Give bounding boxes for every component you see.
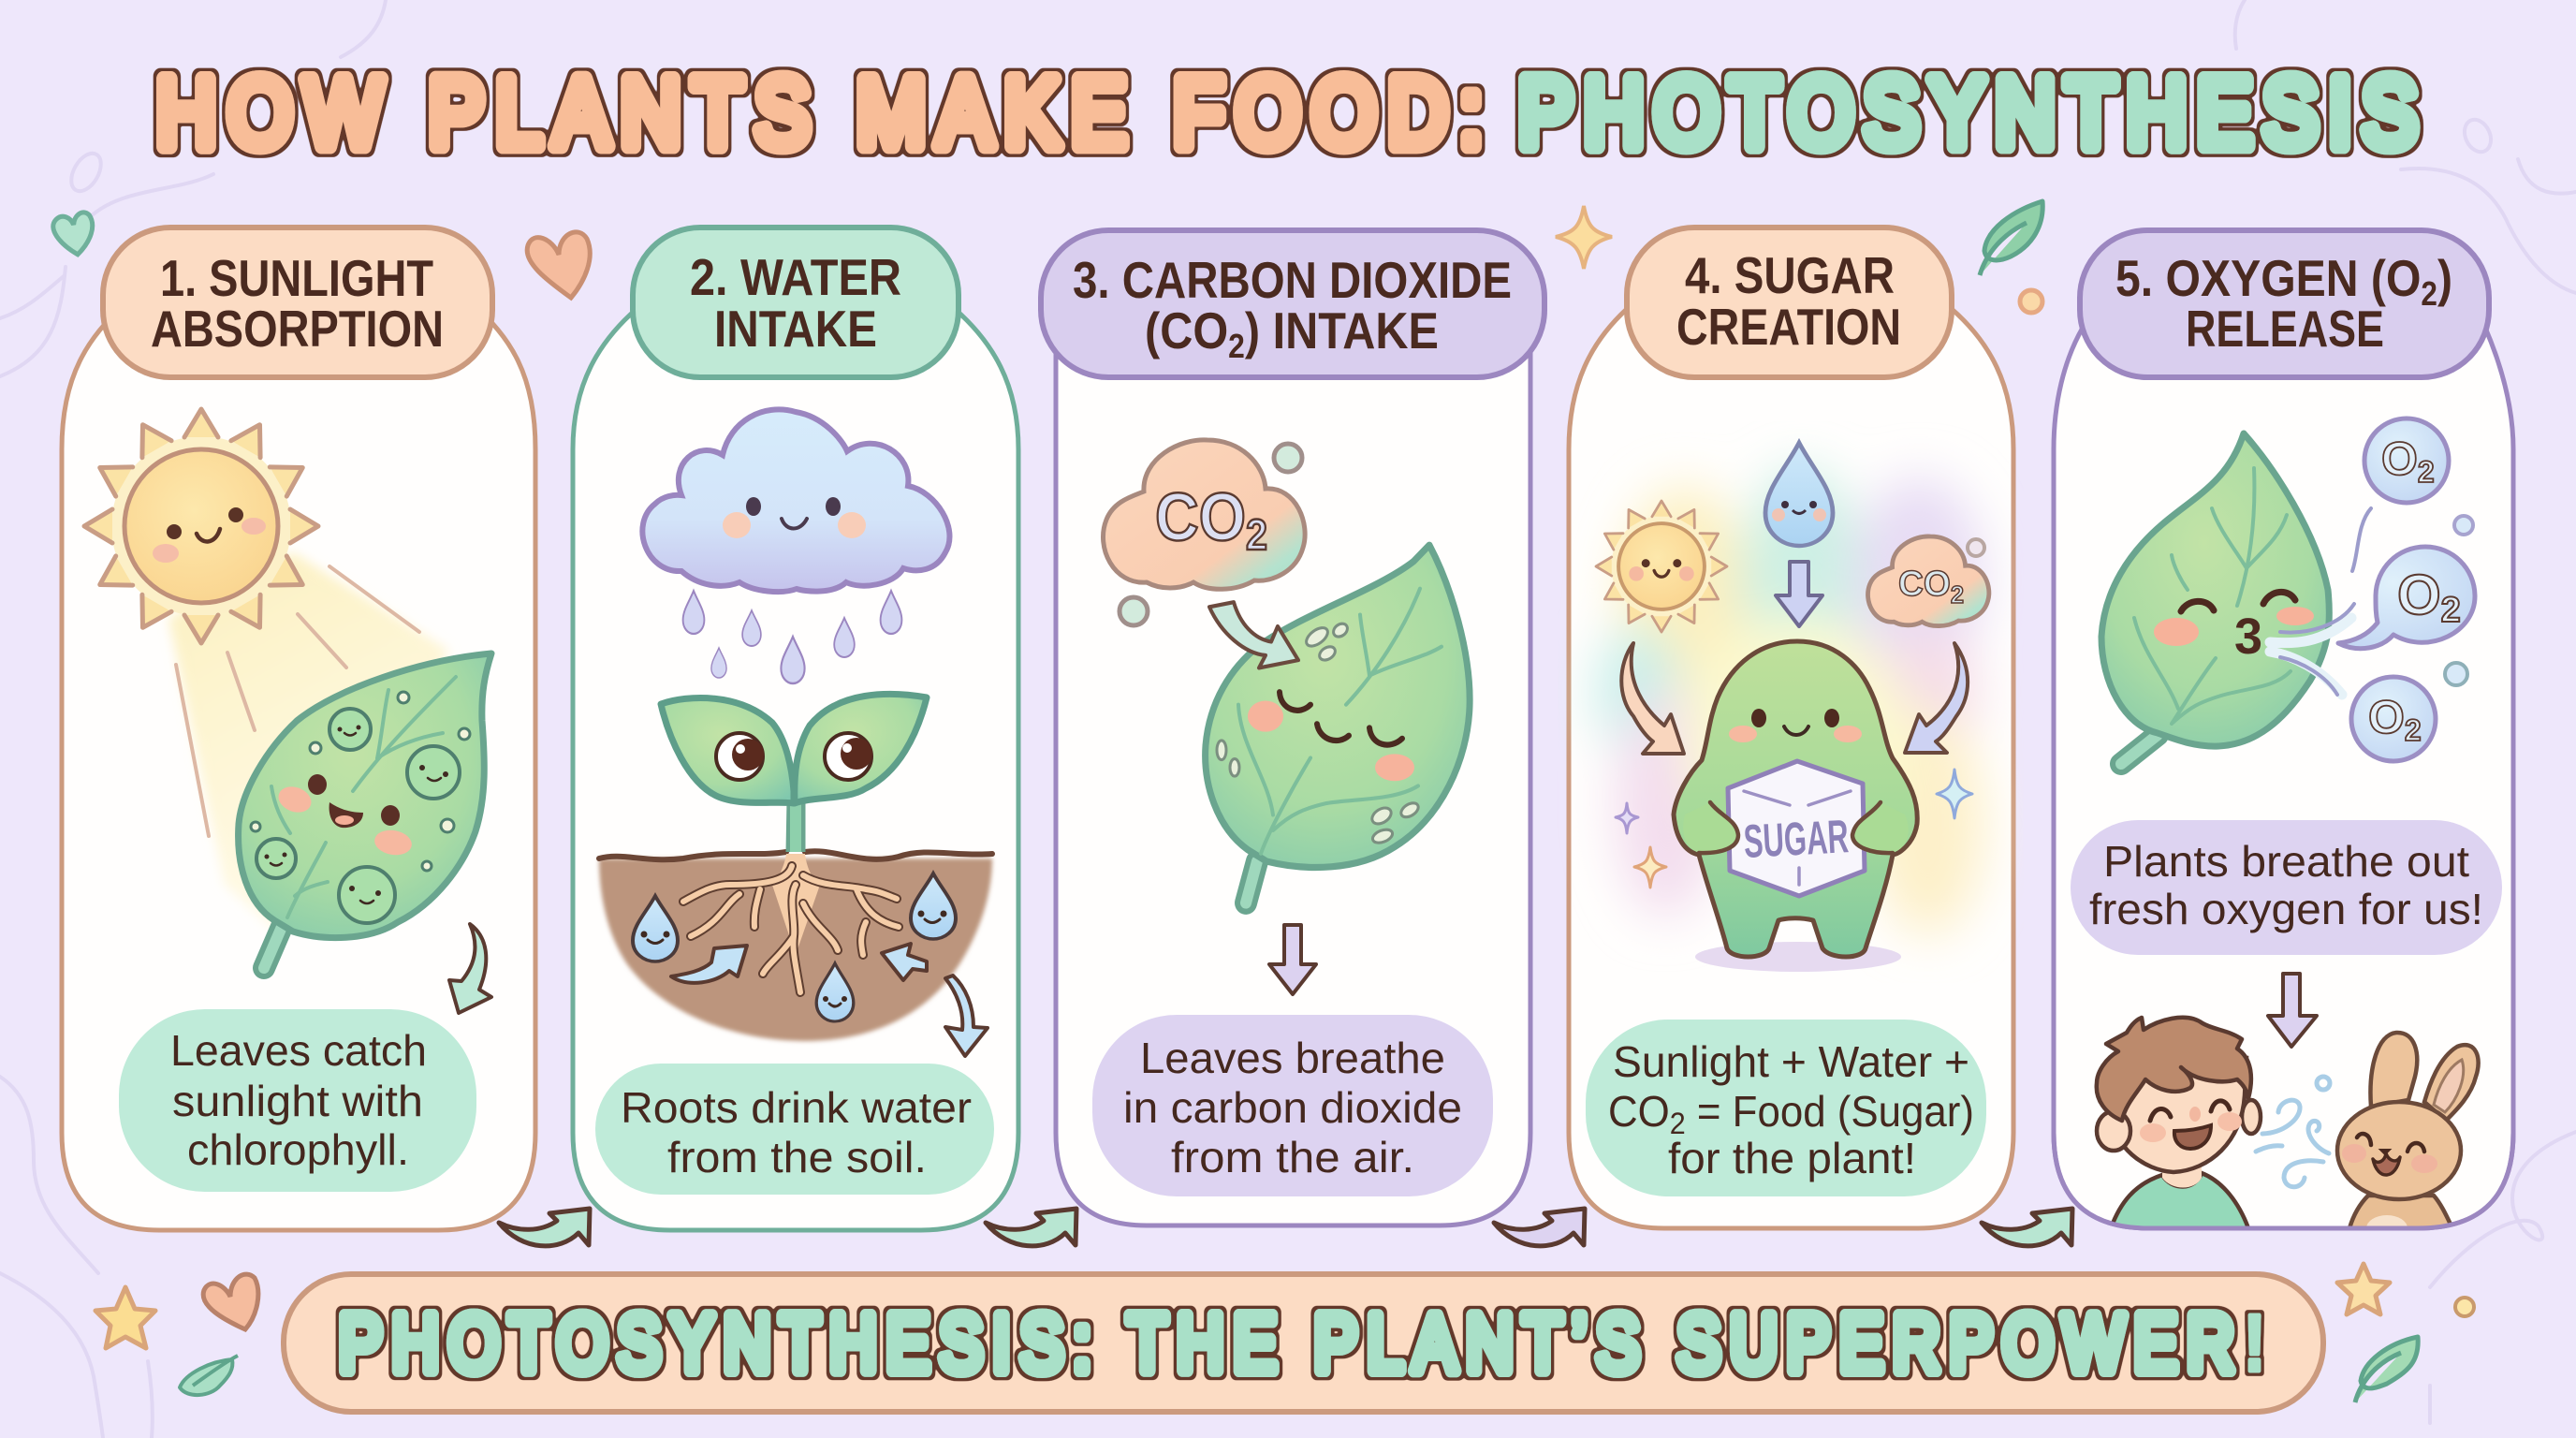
oxygen bubbles: 2 (2418, 455, 2435, 489)
arrow: caption to child (2268, 974, 2317, 1047)
oxygen bubbles: 2 (2441, 591, 2461, 630)
icon: water drop (1765, 443, 1833, 546)
shadow (1695, 942, 1901, 972)
caption 3: in carbon dioxide (1123, 1083, 1462, 1132)
title: PHOTOSYNTHESIS (1518, 59, 2418, 168)
panel 5 header: RELEASE (2186, 300, 2384, 358)
footer banner (284, 1274, 2323, 1412)
caption 2 (595, 1064, 994, 1195)
caption 1: chlorophyll. (187, 1125, 409, 1174)
icon: bottom right dot (2455, 1298, 2474, 1316)
title: HOW PLANTS MAKE FOOD: (156, 59, 1483, 168)
icon: bottom heart (203, 1274, 258, 1329)
footer text: PHOTOSYNTHESIS: THE PLANT’S SUPERPOWER! (339, 1300, 2265, 1388)
panel 2 card (573, 309, 1018, 1230)
icon: peach heart (527, 232, 590, 298)
arrow: CO2 to leaf (1209, 602, 1298, 668)
icon: peach dot (2020, 290, 2042, 313)
icon: leaf blowing oxygen (2101, 433, 2329, 764)
panel 1 header: 1. SUNLIGHT (160, 249, 433, 307)
icon: green leaf (1980, 201, 2042, 275)
caption 5: fresh oxygen for us! (2089, 885, 2483, 933)
panel 3 header: 2 (1228, 327, 1245, 365)
character holding sugar cube (1674, 641, 1917, 957)
panel: step 2 water intake (573, 227, 1018, 1230)
sparkles (1616, 770, 1972, 888)
sugar cube (1683, 761, 1909, 896)
caption 5 (2071, 820, 2502, 955)
arrow: sun to character (1621, 643, 1684, 754)
caption 2: Roots drink water (621, 1083, 972, 1132)
oxygen wisps (2270, 508, 2371, 695)
icon: CO2 cloud: 2 (1246, 510, 1267, 559)
bunny (2337, 1033, 2479, 1241)
oxygen bubbles: O (2368, 691, 2405, 743)
icon: bottom right leaf (2355, 1337, 2418, 1402)
child (2097, 1018, 2261, 1228)
panel 5 header: ) (2437, 249, 2452, 307)
icon: leaf blowing oxygen: 3 (2234, 609, 2262, 665)
icon: small CO2 cloud: CO (1898, 565, 1952, 604)
panel 5 header (2080, 230, 2489, 377)
panel: step 1 sunlight absorption (62, 227, 535, 1230)
panel 4 card (1569, 309, 2013, 1228)
caption 4: = Food (Sugar) (1686, 1087, 1974, 1136)
caption 2: from the soil. (667, 1133, 927, 1181)
arrow: leaf to caption (1269, 925, 1316, 994)
child and bunny (2097, 1018, 2479, 1241)
panel 5 header: 2 (2421, 274, 2437, 313)
caption 4: CO (1608, 1087, 1673, 1136)
icon: CO2 cloud: CO (1155, 480, 1256, 555)
caption 4: 2 (1670, 1107, 1686, 1140)
caption 1: sunlight with (172, 1077, 423, 1125)
oxygen bubbles: 2 (2405, 713, 2422, 747)
caption 3: Leaves breathe (1140, 1034, 1445, 1082)
icon: bottom leaf (180, 1356, 238, 1395)
panel 1 header: ABSORPTION (151, 300, 444, 358)
arrow: step 1 to 2 (499, 1209, 590, 1246)
icon: small sun (1596, 501, 1727, 632)
icon: sleepy leaf (1206, 545, 1470, 902)
panel 3 card (1056, 337, 1530, 1225)
caption 4 (1586, 1020, 1986, 1196)
arrow: CO2 to character (1905, 643, 1968, 753)
icon: soil with roots (599, 851, 992, 1056)
title (156, 59, 2417, 168)
panel 2 header: 2. WATER (690, 248, 901, 306)
arrow: sun leaf to caption (449, 924, 491, 1013)
light beam (168, 552, 449, 936)
caption 5: Plants breathe out (2103, 837, 2469, 886)
icon: sparkle (1556, 206, 1612, 269)
panel 3 header: 3. CARBON DIOXIDE (1073, 251, 1512, 309)
icon: sprout with eyes (661, 694, 927, 852)
oxygen bubbles: O (2397, 564, 2441, 626)
sugar cube: SUGAR (1742, 810, 1850, 868)
arrow: step 2 to 3 (986, 1209, 1076, 1246)
icon: CO2 cloud (1104, 440, 1305, 625)
icon: small CO2 cloud: 2 (1951, 580, 1964, 609)
rainbow glow (1596, 468, 1984, 936)
caption 3 (1092, 1015, 1493, 1196)
icon: small star (2337, 1264, 2390, 1314)
panel 5 card (2054, 328, 2513, 1228)
icon: rain cloud (642, 409, 949, 683)
panel 3 header (1041, 230, 1544, 377)
icon: smiling sun (84, 409, 318, 643)
panel: step 4 sugar creation (1569, 227, 2013, 1228)
icon: small CO2 cloud (1868, 536, 1989, 626)
panel 3 header: ) INTAKE (1245, 301, 1439, 360)
arrow: step 4 to 5 (1982, 1209, 2072, 1246)
icon: mint heart (51, 212, 96, 257)
caption 3: from the air. (1171, 1133, 1414, 1181)
panel: step 3 carbon dioxide intake (1041, 230, 1544, 1225)
breeze swirls (2256, 1077, 2330, 1187)
arrow: step 3 to 4 (1494, 1209, 1585, 1246)
panel 1 card (62, 304, 535, 1230)
caption 4: Sunlight + Water + (1613, 1037, 1969, 1086)
panel 4 header (1627, 227, 1952, 377)
panel 1 header (103, 227, 492, 377)
panel 3 header: (CO (1145, 301, 1239, 360)
panel: step 5 oxygen release (2054, 230, 2513, 1241)
arrow: drop down (1776, 562, 1822, 626)
caption 1: Leaves catch (170, 1026, 427, 1075)
panel 4 header: 4. SUGAR (1685, 246, 1895, 304)
panel 2 header: INTAKE (714, 300, 877, 358)
panel 5 header: 5. OXYGEN (O (2115, 249, 2465, 307)
panel 4 header: CREATION (1676, 298, 1901, 356)
water arrows (671, 944, 988, 1056)
icon: happy leaf with chloroplasts (239, 653, 491, 968)
caption 1 (119, 1009, 476, 1192)
icon: yellow star (95, 1287, 155, 1348)
oxygen bubbles: O (2381, 433, 2418, 485)
caption 4: for the plant! (1668, 1134, 1916, 1182)
panel 2 header (633, 227, 959, 377)
oxygen bubbles (2338, 418, 2475, 761)
